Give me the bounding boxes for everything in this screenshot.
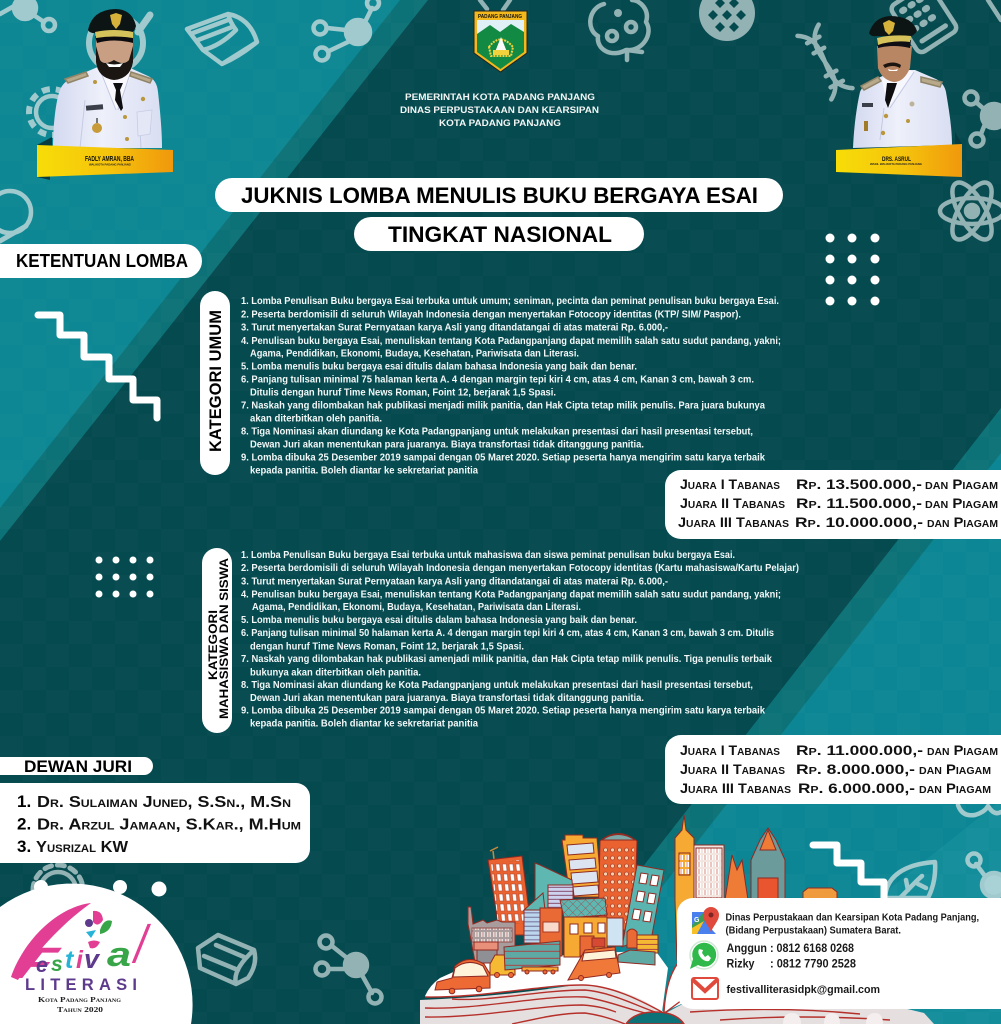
rules list: kategori umum: Agama, Pendidikan, Ekonomi, Budaya, Kesehatan, Pariwisata dan Literasi. [250, 348, 579, 360]
icon: calculator [889, 0, 958, 54]
subtitle pill [354, 217, 644, 251]
zigzag stairs left [38, 315, 157, 418]
building: stripe block [524, 893, 545, 943]
section pill: ketentuan lomba [0, 244, 202, 278]
vice mayor banner: WAKIL WALIKOTA PADANG PANJANG [870, 162, 923, 166]
mayor banner: FADLY AMRAN, BBA [85, 156, 134, 163]
rules list: kategori umum: 2. Peserta berdomisili di seluruh Wilayah Indonesia dengan menyertakan Fotocopy identitas (KTP/ SIM/ Paspor). [241, 310, 741, 320]
icon: globe [699, 0, 755, 41]
logo caption: Tahun 2020 [57, 1005, 103, 1014]
header: institution text: PEMERINTAH KOTA PADANG PANJANG [405, 92, 595, 103]
contact: email: festivalliterasidpk@gmail.com [726, 984, 880, 996]
rules list: kategori umum: akan diterbitkan oleh panitia. [250, 414, 382, 424]
mayor banner [37, 137, 173, 180]
vertical label: kategori mahasiswa dan siswa [202, 548, 232, 733]
icon: books bottom [198, 935, 255, 984]
rules list: kategori umum: kepada panitia. Boleh diantar ke sekretariat panitia [250, 466, 479, 476]
icon: stroke fragments near emblem [480, 0, 510, 10]
icon: gmail [692, 978, 718, 999]
icon: google maps: G [694, 917, 700, 924]
logo: festival literasi [0, 880, 193, 1024]
contact: address [726, 912, 979, 936]
logo letters e s t i v: s [51, 953, 63, 976]
emblem: Padang Panjang: PADANG PANJANG [478, 14, 522, 20]
rules list: kategori umum: 3. Turut menyertakan Surat Pernyataan karya Asli yang ditandatangai di atas materai Rp. 6.000,- [241, 322, 668, 334]
logo letters e s t i v: v [84, 944, 101, 974]
rules list: kategori mahasiswa dan siswa: 3. Turut menyertakan Surat Pernyataan karya Asli yang ditandatangai di atas materai Rp. 6.000,- [241, 576, 668, 588]
rules list: kategori umum: 8. Tiga Nominasi akan diundang ke Kota Padangpanjang untuk melakukan presentasi dari hasil presentasi tersebut, [241, 426, 753, 438]
prize panel: kategori mahasiswa dan siswa: Juara II Tabanas [680, 761, 785, 777]
logo caption [38, 995, 121, 1014]
building: small orange [540, 908, 562, 956]
logo letters e s t i v: e [36, 954, 48, 977]
icon: gear [29, 89, 75, 135]
building: stacked yellow and teal [618, 935, 658, 965]
header: institution text [400, 92, 599, 129]
prize panel: kategori umum: Juara III Tabanas [678, 514, 789, 530]
prize panel: kategori mahasiswa dan siswa [665, 735, 1001, 804]
icon: molecule lower right [968, 854, 1001, 897]
bottom humps on book [783, 1013, 883, 1024]
rules list: kategori mahasiswa dan siswa: 7. Naskah yang dilombakan hak publikasi amenjadi milik panitia, dan Hak Cipta tetap milik penulis. Tiga penulis terbaik [241, 654, 773, 665]
rules list: kategori umum: Ditulis dengan huruf Time News Roman, Foint 12, berjarak 1,5 Spasi. [250, 388, 556, 398]
section pill: dewan juri [0, 757, 153, 776]
building: yellow tower [562, 835, 602, 897]
mayor banner: WALIKOTA PADANG PANJANG [89, 163, 132, 167]
icon: whatsapp [690, 941, 718, 969]
icon: dna [798, 25, 852, 99]
building: weathervane tower [488, 847, 532, 935]
prize panel: kategori mahasiswa dan siswa: Rp. 6.000.000,- [798, 780, 915, 796]
rules list: kategori umum [241, 296, 781, 476]
rules list: kategori umum: 6. Panjang tulisan minimal 75 halaman kerta A. 4 dengan margin tepi kiri 4 cm, atas 4 cm, Kanan 3 cm, bawah 3 cm. [241, 374, 754, 386]
rules list: kategori mahasiswa dan siswa: 1. Lomba Penulisan Buku bergaya Esai terbuka untuk mahasiswa dan siswa peminat penulisan buku bergaya Esai. [241, 550, 735, 561]
icon: leaf [885, 862, 935, 898]
prize panel: kategori umum: Juara II Tabanas [680, 495, 785, 511]
building: yellow house [560, 898, 623, 957]
vice mayor banner [836, 132, 962, 177]
prize panel: kategori umum: Rp. 13.500.000,- [796, 476, 922, 492]
jury panel: 3. [17, 837, 31, 856]
portrait: mayor [37, 9, 173, 180]
portrait: vice mayor [836, 16, 962, 177]
icon: gear above logo [33, 865, 83, 915]
rules list: kategori umum: 9. Lomba dibuka 25 Desember 2019 sampai dengan 05 Maret 2020. Setiap peserta hanya mengirim satu karya terbaik [241, 452, 766, 464]
icon: bowl top of lower right [958, 805, 1001, 815]
icon: stroke top right [988, 0, 1001, 20]
icon: cell [590, 0, 649, 60]
prize panel: kategori umum: dan Piagam [925, 495, 998, 511]
icon: molecule bottom [316, 936, 382, 1004]
rules list: kategori mahasiswa dan siswa: Dewan Juri akan menentukan para juaranya. Biaya transfortasi tidak ditanggung panitia. [250, 693, 644, 704]
section pill: ketentuan lomba: KETENTUAN LOMBA [16, 251, 188, 271]
rules list: kategori mahasiswa dan siswa: 4. Penulisan buku bergaya Esai, menuliskan tentang Kota Padangpanjang dapat memilih salah satu sudut pandang, yakni; [241, 590, 781, 600]
contact: address: (Bidang Perpustakaan) Sumatera Barat. [726, 926, 901, 936]
prize panel: kategori umum: Rp. 10.000.000,- [795, 514, 923, 530]
vertical label: kategori umum [200, 291, 230, 475]
jury panel: 2. [17, 814, 31, 834]
icon: molecule top left [0, 0, 55, 31]
prize panel: kategori umum: Rp. 11.500.000,- [796, 495, 922, 511]
rules list: kategori mahasiswa dan siswa: Agama, Pendidikan, Ekonomi, Budaya, Kesehatan, Pariwisata dan Literasi. [252, 602, 581, 613]
jury panel: Dr. Sulaiman Juned, S.Sn., M.Sn [37, 794, 291, 811]
rules list: kategori mahasiswa dan siswa: 8. Tiga Nominasi akan diundang ke Kota Padangpanjang untuk melakukan presentasi dari hasil presentasi tersebut, [241, 680, 753, 691]
logo letters e s t i v: t [65, 946, 75, 974]
icon: molecule top centre [314, 0, 379, 60]
logo letters a l: l [125, 914, 157, 975]
contact: phone numbers: Anggun : 0812 6168 0268 [726, 943, 855, 955]
prize panel: kategori umum: dan Piagam [927, 514, 998, 530]
logo caption: Kota Padang Panjang [38, 995, 121, 1004]
header: institution text: DINAS PERPUSTAKAAN DAN KEARSIPAN [400, 105, 599, 116]
prize panel: kategori umum: Juara I Tabanas [680, 476, 780, 492]
title pill: JUKNIS LOMBA MENULIS BUKU BERGAYA ESAI [241, 183, 758, 208]
contact panel [677, 898, 1001, 1009]
header: institution text: KOTA PADANG PANJANG [439, 118, 561, 129]
icon: books [187, 14, 257, 64]
jury panel: 1. [17, 792, 31, 811]
prize panel: kategori mahasiswa dan siswa: Rp. 8.000.000,- [796, 761, 915, 777]
dots grid right [826, 234, 880, 306]
rules list: kategori mahasiswa dan siswa: 2. Peserta berdomisili di seluruh Wilayah Indonesia dengan menyertakan Fotocopy identitas (Kartu mahasiswa/Kartu Pelajar) [241, 563, 799, 574]
icon: google maps [692, 907, 719, 934]
rules list: kategori mahasiswa dan siswa: bukunya akan diterbitkan oleh panitia. [250, 668, 421, 678]
vehicle: van [568, 938, 620, 980]
buildings left of spine [435, 834, 664, 994]
building: glass block [535, 863, 574, 910]
logo letters a l: a [107, 936, 131, 974]
rules list: kategori umum: 5. Lomba menulis buku bergaya esai ditulis dalam bahasa Indonesia yang baik dan benar. [241, 362, 637, 372]
vertical label: kategori mahasiswa dan siswa: KATEGORI [208, 610, 220, 680]
logo letter F: F [5, 939, 71, 988]
icon: magnifier behind mayor [89, 15, 150, 70]
vice mayor banner: DRS. ASRUL [882, 156, 911, 163]
vehicle: car [435, 959, 490, 994]
vertical label: kategori umum: KATEGORI UMUM [207, 310, 225, 452]
rules list: kategori mahasiswa dan siswa [241, 550, 799, 730]
rules list: kategori mahasiswa dan siswa: 9. Lomba dibuka 25 Desember 2019 sampai dengan 05 Maret 2020. Setiap peserta hanya mengirim satu karya terbaik [241, 706, 766, 716]
prize panel: kategori mahasiswa dan siswa: dan Piagam [919, 761, 991, 777]
vehicle: truck [490, 941, 560, 978]
jury panel: Dr. Arzul Jamaan, S.Kar., M.Hum [37, 816, 301, 834]
zigzag stairs lower right [813, 845, 884, 900]
prize panel: kategori mahasiswa dan siswa: dan Piagam [927, 742, 998, 758]
logo letters e s t i v: i [76, 946, 84, 974]
dots grid left [96, 556, 154, 598]
icon: molecule right [964, 92, 1001, 146]
logo literasi: LITERASI [25, 976, 137, 994]
prize panel: kategori mahasiswa dan siswa: dan Piagam [919, 780, 991, 796]
icon: magnifier left edge [0, 191, 31, 241]
jury panel [0, 783, 310, 863]
rules list: kategori umum: Dewan Juri akan menentukan para juaranya. Biaya transfortasi tidak ditanggung panitia. [250, 440, 644, 450]
contact: phone numbers [726, 943, 857, 970]
subtitle pill: TINGKAT NASIONAL [388, 222, 612, 247]
logo brush swoosh [11, 903, 91, 980]
prize panel: kategori mahasiswa dan siswa: Juara III Tabanas [680, 780, 791, 796]
rules list: kategori mahasiswa dan siswa: 6. Panjang tulisan minimal 50 halaman kerta A. 4 dengan margin tepi kiri 4 cm, atas 4 cm, Kanan 3 cm, bawah 3 cm. Ditulis [241, 628, 775, 639]
prize panel: kategori umum [665, 470, 1001, 539]
jury panel: Yusrizal KW [36, 839, 129, 856]
logo letters e s t i v [36, 944, 101, 977]
icon: atom [940, 177, 1001, 245]
prize panel: kategori mahasiswa dan siswa: Rp. 11.000.000,- [796, 742, 923, 758]
building: teal tower [622, 865, 664, 948]
section pill: dewan juri: DEWAN JURI [24, 758, 132, 776]
emblem: Padang Panjang [474, 11, 527, 72]
rules list: kategori mahasiswa dan siswa: dengan huruf Time News Roman, Foint 12, berjarak 1,5 Spasi. [250, 642, 524, 652]
building: round top [598, 834, 637, 930]
logo letters a l [107, 914, 157, 975]
rules list: kategori umum: 1. Lomba Penulisan Buku bergaya Esai terbuka untuk umum; seniman, pecinta dan peminat penulisan buku bergaya Esai. [241, 296, 779, 307]
vertical label: kategori mahasiswa dan siswa: MAHASISWA DAN SISWA [217, 558, 231, 719]
rules list: kategori mahasiswa dan siswa: 5. Lomba menulis buku bergaya esai ditulis dalam bahasa Indonesia yang baik dan benar. [241, 615, 637, 626]
contact: phone numbers: : 0812 7790 2528 [770, 958, 857, 970]
rules list: kategori umum: 7. Naskah yang dilombakan hak publikasi menjadi milik panitia, dan Hak Cipta tetap milik penulis. Para juara bukunya [241, 400, 766, 412]
book pages [420, 950, 934, 1024]
contact: phone numbers: Rizky [726, 958, 755, 970]
buildings behind panel right of spine [675, 815, 837, 960]
logo flower [85, 911, 112, 948]
prize panel: kategori umum: dan Piagam [925, 476, 998, 492]
rules list: kategori umum: 4. Penulisan buku bergaya Esai, menuliskan tentang Kota Padangpanjang dapat memilih salah satu sudut pandang, yakni; [241, 336, 781, 347]
title pill [215, 178, 783, 212]
city on open book illustration [420, 815, 934, 1024]
rules list: kategori mahasiswa dan siswa: kepada panitia. Boleh diantar ke sekretariat panitia [250, 718, 479, 730]
prize panel: kategori mahasiswa dan siswa: Juara I Tabanas [680, 742, 780, 758]
building: factory [468, 907, 515, 963]
